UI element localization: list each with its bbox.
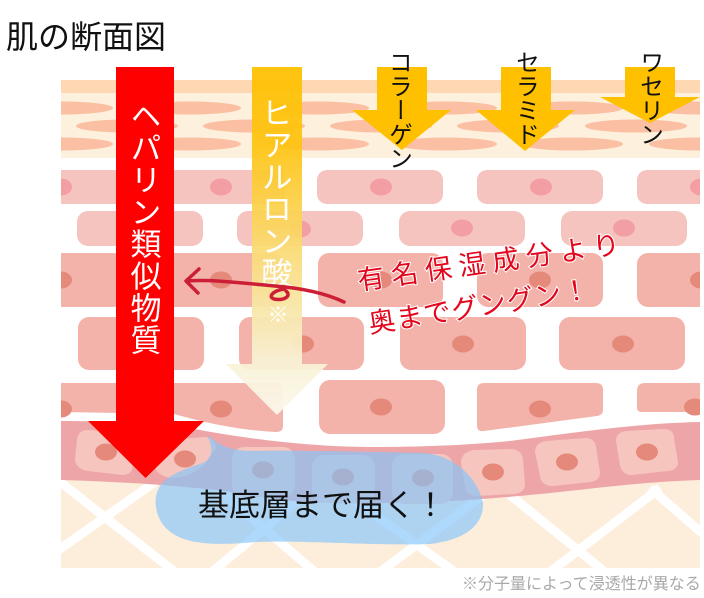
basal layer band — [61, 421, 700, 503]
arrow: collagen — [352, 67, 451, 150]
label: vaseline: ワセリン — [636, 50, 662, 146]
basal cells — [75, 429, 678, 504]
handwritten note line 1: 有名保湿成分より — [356, 228, 629, 296]
handwritten note line 2: 奥までグングン！ — [366, 274, 592, 339]
footnote: ※分子量によって浸透性が異なる — [462, 575, 701, 593]
lower dermis layer with lattice — [61, 480, 700, 568]
label: heparinoid: ヘパリン類似物質 — [126, 100, 161, 356]
arrow: hyaluronic acid — [226, 67, 328, 415]
middle cell nuclei — [50, 272, 704, 418]
blue highlight blob — [156, 435, 483, 544]
upper cell rows — [0, 170, 704, 246]
label: ceramide: セラミド — [512, 50, 538, 146]
label: hyaluronic acid: ヒアルロン酸 — [256, 97, 292, 289]
upper cell nuclei — [50, 178, 704, 238]
basal cell nuclei — [95, 444, 658, 486]
hand-drawn red arrow — [186, 269, 344, 302]
middle cell rows — [0, 253, 704, 434]
stratum corneum layer — [11, 80, 704, 158]
blob caption: 基底層まで届く！ — [198, 488, 446, 523]
arrow: vaseline — [600, 67, 700, 123]
asterisk on hyaluronic acid: ※ — [268, 304, 288, 327]
arrow: ceramide — [476, 67, 575, 151]
arrow: heparinoid — [88, 67, 204, 478]
label: collagen: コラーゲン — [384, 50, 412, 170]
title: 肌の断面図 — [6, 19, 166, 55]
